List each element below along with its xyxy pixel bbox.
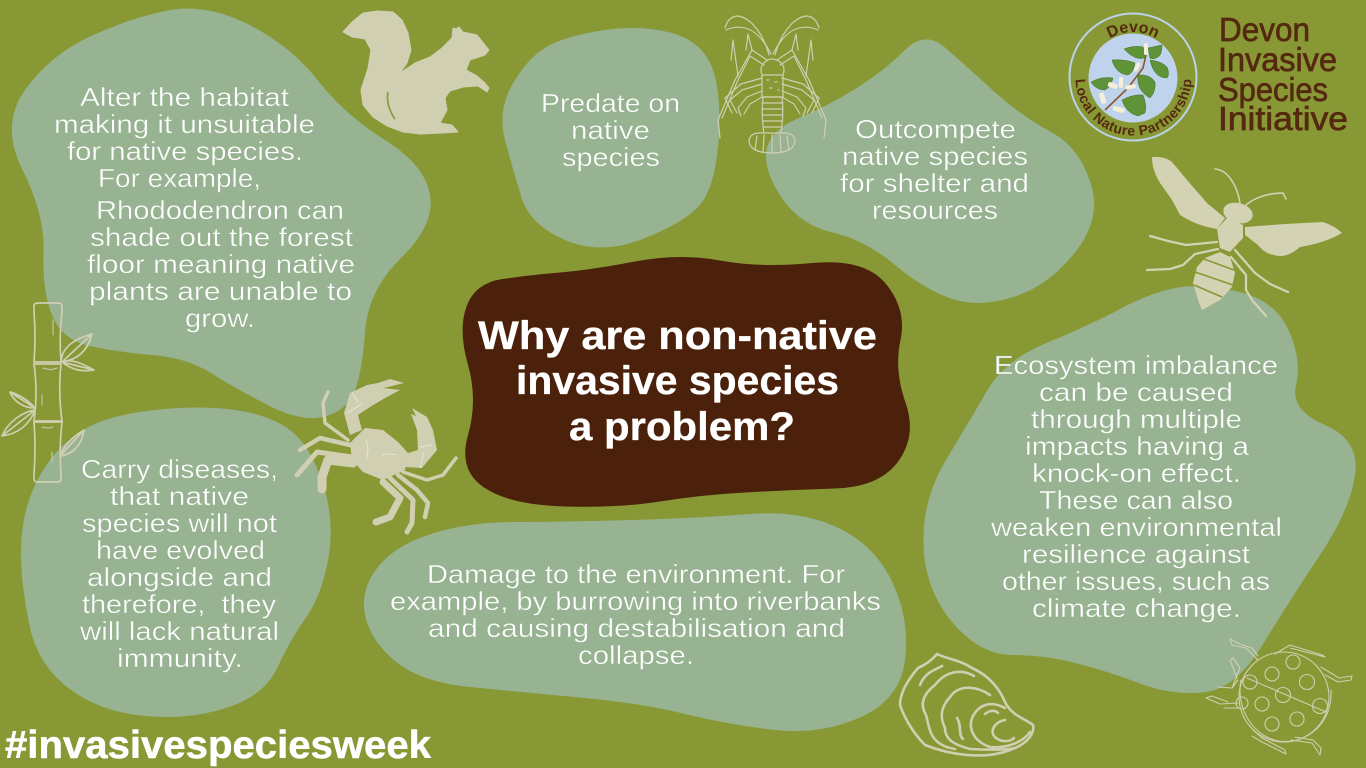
panel: alter the habitat: floor meaning native: [87, 249, 355, 279]
icon: ladybird: [1206, 639, 1352, 755]
panel: ecosystem imbalance: weaken environmental: [990, 512, 1282, 542]
panel: predate on native species: native: [571, 115, 650, 145]
panel: outcompete native species: native species: [842, 141, 1028, 171]
panel: alter the habitat: Rhododendron can: [96, 195, 344, 225]
panel: outcompete native species: [766, 39, 1094, 303]
panel: ecosystem imbalance: climate change.: [1032, 593, 1241, 623]
panel: alter the habitat: shade out the forest: [90, 222, 354, 252]
panel: alter the habitat: for native species.: [67, 136, 303, 166]
panel: carry diseases: alongside and: [87, 562, 272, 592]
title: [478, 314, 877, 449]
title: Why are non-native: [478, 314, 877, 358]
icon: oyster: [900, 654, 1033, 755]
logo: Devon Local Nature Partnership badge: Local Nature Partnership: [1076, 79, 1194, 136]
icon: bamboo: [2, 303, 94, 482]
panel: damage to the environment: and causing destabilisation and: [428, 613, 845, 643]
logo: Devon Local Nature Partnership badge: Devon: [1106, 24, 1158, 38]
panel: predate on native species: [502, 28, 719, 248]
panel: damage to the environment: collapse.: [578, 640, 694, 670]
panel: damage to the environment: [364, 513, 906, 731]
panel: ecosystem imbalance: other issues, such as: [1002, 566, 1270, 596]
panel: carry diseases: species will not: [82, 508, 278, 538]
panel: carry diseases: therefore, they: [82, 589, 276, 619]
panel: ecosystem imbalance: can be caused: [1039, 377, 1233, 407]
panel: alter the habitat: Alter the habitat: [80, 82, 290, 112]
panel: alter the habitat: [12, 9, 431, 418]
panel: alter the habitat: plants are unable to: [89, 276, 352, 306]
panel: ecosystem imbalance: These can also: [1039, 485, 1233, 515]
panel: carry diseases: [21, 408, 331, 717]
title: a problem?: [569, 405, 795, 449]
logo: Devon Invasive Species Initiative wordmark: Invasive: [1218, 41, 1337, 78]
logo: Devon Invasive Species Initiative wordmark: Species: [1218, 71, 1328, 108]
logo: Devon Invasive Species Initiative wordmark: [1218, 11, 1348, 137]
panel: carry diseases: Carry diseases,: [81, 454, 278, 484]
panel: outcompete native species: for shelter and: [840, 168, 1029, 198]
logo: Devon Local Nature Partnership badge: [1068, 12, 1198, 142]
logo: Devon Invasive Species Initiative wordmark: Devon: [1219, 11, 1310, 48]
panel: carry diseases: that native: [110, 481, 249, 511]
panel: alter the habitat: grow.: [185, 303, 255, 333]
title: invasive species: [516, 359, 839, 403]
panel: ecosystem imbalance: Ecosystem imbalance: [994, 350, 1278, 380]
icon: squirrel: [343, 11, 489, 134]
panel: ecosystem imbalance: through multiple: [1031, 404, 1242, 434]
panel: outcompete native species: resources: [872, 195, 998, 225]
panel: alter the habitat: making it unsuitable: [54, 109, 315, 139]
icon: wasp: [1147, 157, 1342, 316]
panel: alter the habitat: For example,: [98, 163, 261, 193]
panel: carry diseases: immunity.: [117, 643, 243, 673]
panel: predate on native species: Predate on: [541, 88, 680, 118]
hashtag: #invasivespeciesweek: [5, 724, 431, 767]
logo: Devon Invasive Species Initiative wordmark: Initiative: [1218, 100, 1348, 137]
panel: outcompete native species: Outcompete: [855, 114, 1016, 144]
panel: ecosystem imbalance: resilience against: [1022, 539, 1251, 569]
icon: lobster: [718, 16, 826, 153]
panel: carry diseases: have evolved: [96, 535, 265, 565]
panel: damage to the environment: example, by burrowing into riverbanks: [390, 586, 881, 616]
panel: ecosystem imbalance: [923, 286, 1356, 693]
panel: ecosystem imbalance: knock-on effect.: [1032, 458, 1241, 488]
panel: damage to the environment: Damage to the environment. For: [427, 559, 845, 589]
panel: ecosystem imbalance: impacts having a: [1025, 431, 1250, 461]
panel: predate on native species: species: [562, 142, 660, 172]
icon: crab: [297, 379, 456, 532]
panel: central question: [463, 257, 910, 507]
panel: carry diseases: will lack natural: [79, 616, 279, 646]
